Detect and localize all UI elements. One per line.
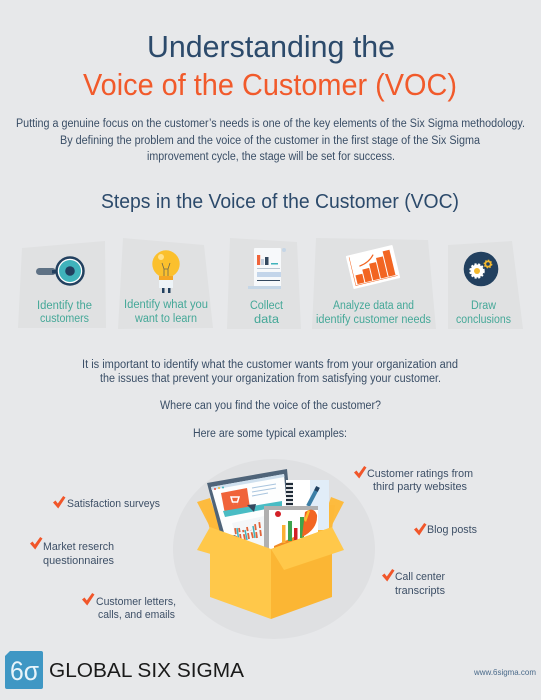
report with charts: [264, 506, 318, 554]
icon: rising bar chart: [346, 245, 400, 289]
item: blog posts: Blog posts: [427, 524, 477, 536]
step 3: collect data: [227, 238, 301, 329]
chart paper: [232, 516, 268, 552]
icon: light bulb: [152, 250, 180, 293]
label: [456, 300, 511, 326]
label: Draw: [471, 300, 497, 312]
item: call center transcripts: transcripts: [395, 585, 445, 597]
middle text block: Here are some typical examples:: [193, 428, 347, 440]
item: customer ratings: Customer ratings from: [367, 468, 473, 480]
icon: gears: [464, 252, 498, 286]
notebook and pen: [286, 480, 329, 530]
item: market research questionnaires: questionnaires: [43, 555, 114, 567]
label: Identify what you: [124, 299, 208, 311]
laptop screen: [207, 469, 295, 540]
box body: [210, 535, 271, 619]
label: Analyze data and: [333, 300, 414, 312]
illustration: open box with documents: [173, 459, 375, 639]
label: Collect: [250, 300, 284, 312]
step 2: identify what you want to learn: [118, 238, 213, 329]
item: customer letters: Customer letters,: [96, 596, 176, 608]
logo: Global Six Sigma: GLOBAL SIX SIGMA: [49, 659, 244, 682]
item: customer letters: [82, 593, 176, 621]
intro paragraph: [16, 118, 525, 163]
title: Voice of the Customer (VOC): [83, 67, 457, 102]
label: [316, 300, 431, 326]
icon: report document: [248, 248, 286, 289]
label: [37, 300, 92, 325]
title: [83, 29, 457, 102]
step 1: identify the customers: [18, 241, 106, 328]
item: market research questionnaires: [30, 537, 114, 567]
step 5: draw conclusions: [448, 241, 523, 329]
checklist: right column: [354, 466, 477, 597]
middle text block: the issues that prevent your organization from satisfying your customer.: [100, 373, 441, 385]
middle text block: Where can you find the voice of the customer?: [160, 400, 381, 412]
item: customer ratings: third party websites: [373, 481, 467, 493]
logo: Global Six Sigma: [5, 651, 244, 689]
intro paragraph: improvement cycle, the stage will be set for success.: [147, 151, 395, 163]
item: call center transcripts: [382, 569, 445, 597]
middle text block: It is important to identify what the customer wants from your organization and: [82, 359, 458, 371]
label: data: [254, 314, 280, 326]
item: customer letters: calls, and emails: [98, 609, 175, 621]
section heading: Steps in the Voice of the Customer (VOC): [101, 191, 459, 213]
label: Identify the: [37, 300, 92, 312]
item: customer ratings: [354, 466, 473, 493]
logo: Global Six Sigma: 6σ: [10, 656, 39, 686]
label: conclusions: [456, 314, 511, 326]
icon: magnifier eye: [36, 258, 84, 284]
label: [250, 300, 284, 326]
back flaps: [197, 498, 225, 540]
item: satisfaction surveys: Satisfaction surveys: [67, 498, 160, 510]
item: market research questionnaires: Market reserch: [43, 541, 114, 553]
step 4: analyze data: [312, 238, 436, 329]
website url: www.6sigma.com: [473, 667, 536, 677]
label: identify customer needs: [316, 314, 431, 326]
checklist: left column: [30, 496, 176, 621]
title: Understanding the: [147, 29, 395, 64]
label: want to learn: [134, 313, 197, 325]
item: call center transcripts: Call center: [395, 571, 445, 583]
middle text block: [82, 359, 458, 440]
label: customers: [40, 313, 89, 325]
box front flaps: [197, 527, 271, 569]
intro paragraph: By defining the problem and the voice of the customer in the first stage of the Six Sigma: [60, 135, 481, 147]
label: [124, 299, 208, 325]
